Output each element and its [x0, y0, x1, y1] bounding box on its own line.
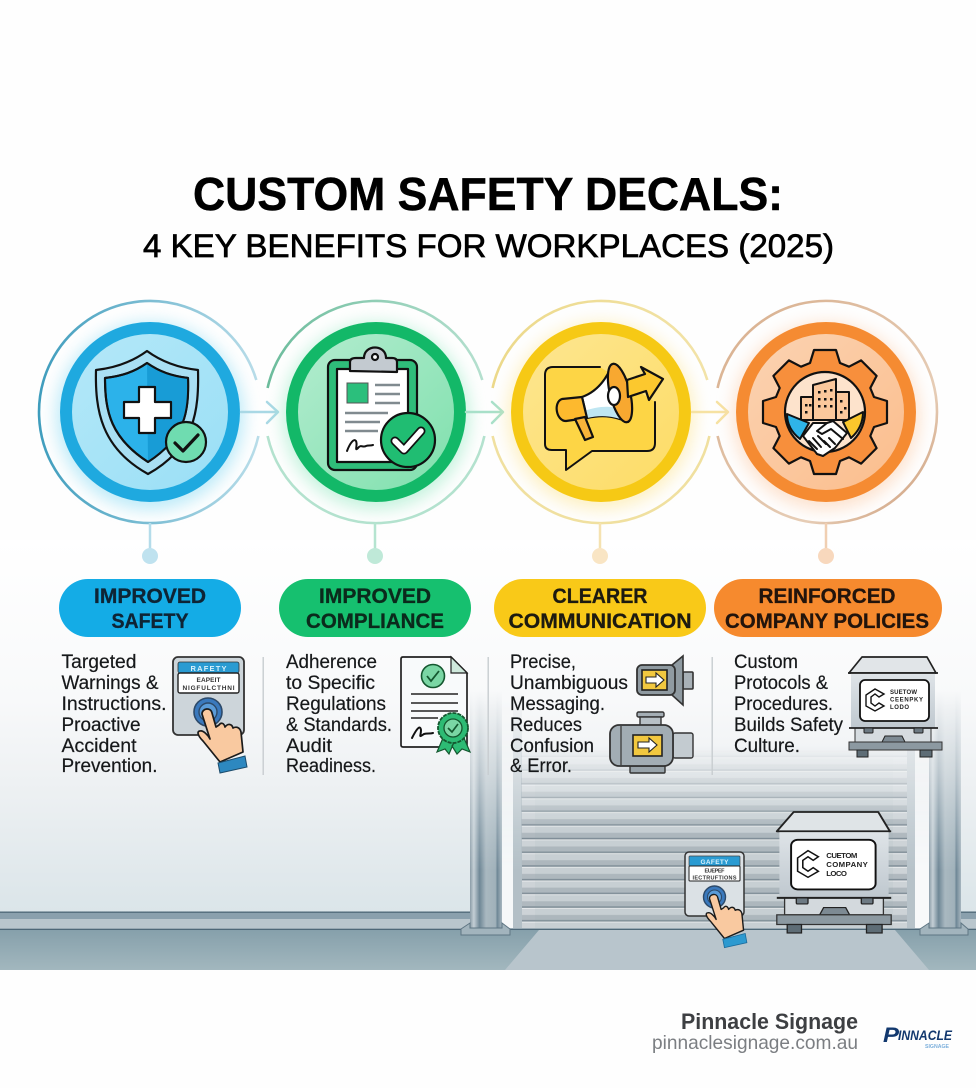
floor [0, 930, 976, 970]
icon: certified document with ribbon [401, 657, 470, 754]
text: improved safety description: Targeted [62, 652, 136, 673]
benefit 2 circle: improved compliance [268, 301, 484, 564]
connector to label [818, 523, 834, 564]
text: improved compliance description [286, 652, 392, 777]
outer ring [39, 301, 258, 523]
text: clearer communication description: Unambiguous [510, 673, 628, 694]
icon: gear with buildings and handshake [763, 350, 887, 474]
pill: clearer communication: CLEARER [552, 585, 648, 608]
icon: safety decal keypad with pointing hand: NIGFULCTHNI [182, 685, 235, 692]
text: clearer communication description [510, 652, 628, 777]
disc [511, 322, 691, 502]
scene: safety decal keypad with pointing hand: IECTRUFTIONS [692, 876, 737, 882]
icon: machine with company logo label: CEENPKY [890, 698, 923, 704]
text: improved compliance description: Readiness. [286, 756, 376, 777]
text: clearer communication description: & Error. [510, 756, 572, 777]
divider 2 [488, 657, 489, 775]
text: improved safety description: Instructions. [62, 694, 166, 715]
background: warehouse scene [0, 694, 976, 970]
text: improved safety description: Prevention. [62, 756, 158, 777]
footer logo: INNACLE [898, 1027, 953, 1043]
text: improved safety description: Warnings & [62, 673, 159, 694]
text: clearer communication description: Messaging. [510, 694, 605, 715]
icon: machine with company logo label: SUETOW [890, 690, 917, 696]
title: CUSTOM SAFETY DECALS: [193, 168, 783, 220]
arrow: safety to compliance [241, 402, 278, 423]
text: improved compliance description: Regulations [286, 694, 386, 715]
roller door [521, 745, 907, 928]
pill: clearer communication: COMMUNICATION [508, 610, 692, 633]
text: reinforced policies description: Protocols & [734, 673, 828, 694]
scene: machine with custom company logo: COMPANY [826, 860, 868, 869]
disc [60, 322, 240, 502]
footer url: pinnaclesignage.com.au [652, 1032, 858, 1054]
disc [736, 322, 916, 502]
arrow: communication to policies [692, 402, 728, 423]
text: improved compliance description: to Specific [286, 673, 375, 694]
connector to label [592, 523, 608, 564]
icon: machine with company logo label: LODO [890, 705, 909, 711]
text: improved compliance description: Audit [286, 736, 333, 757]
text: reinforced policies description: Custom [734, 652, 798, 673]
pill: reinforced company policies: COMPANY POLICIES [725, 610, 929, 633]
wall base strip [0, 912, 976, 930]
icon: motor with arrow label [610, 712, 693, 773]
text: reinforced policies description: Procedures. [734, 694, 833, 715]
outer ring [268, 301, 484, 523]
disc [286, 322, 466, 502]
divider 1 [262, 657, 264, 775]
text: improved safety description: Accident [62, 736, 137, 757]
pill: improved safety [59, 579, 241, 637]
icon: shield with cross and check [96, 351, 206, 474]
icon: safety decal keypad with pointing hand: RAFETY [190, 664, 226, 673]
benefit 3 circle: clearer communication [493, 301, 709, 564]
footer logo: SIGNAGE [925, 1044, 950, 1050]
pill: improved compliance [279, 579, 471, 637]
pill: improved safety: IMPROVED [94, 585, 206, 608]
benefit 4 circle: reinforced company policies [718, 301, 937, 564]
arrow: compliance to communication [466, 402, 503, 423]
pill: reinforced company policies: REINFORCED [758, 585, 896, 608]
pill: improved compliance: IMPROVED [319, 585, 431, 608]
text: reinforced policies description [734, 652, 843, 757]
pill: improved safety: SAFETY [112, 610, 188, 633]
pill: reinforced company policies [714, 579, 942, 637]
icon: safety decal keypad with pointing hand: EAPEIT [196, 677, 221, 684]
icon: machine with company logo label [848, 657, 942, 757]
text: reinforced policies description: Culture. [734, 736, 800, 757]
right door column [907, 702, 961, 928]
scene: safety decal keypad with pointing hand: EUEPEF [704, 868, 725, 874]
footer: company name and url: Pinnacle Signage [681, 1009, 858, 1034]
icon: safety decal keypad with pointing hand [173, 657, 247, 773]
scene: safety decal keypad with pointing hand: GAFETY [700, 859, 729, 866]
connector to label [142, 523, 158, 564]
scene: machine with custom company logo: CUETOM [826, 851, 857, 860]
outer ring [718, 301, 937, 523]
scene: machine with custom company logo: LOCO [826, 869, 847, 878]
text: clearer communication description: Reduces [510, 715, 582, 736]
footer logo [883, 1024, 953, 1050]
text: improved compliance description: & Standards. [286, 715, 392, 736]
connector to label [367, 523, 383, 564]
icon: horn device with arrow label [637, 656, 693, 705]
footer: company name and url [652, 1009, 858, 1054]
outer ring [493, 301, 709, 523]
text: improved compliance description: Adherence [286, 652, 377, 673]
icon: clipboard with check [328, 348, 435, 470]
text: improved safety description [62, 652, 166, 777]
subtitle: 4 KEY BENEFITS FOR WORKPLACES (2025) [143, 228, 834, 264]
pill: clearer communication [494, 579, 706, 637]
scene: machine with custom company logo [777, 812, 891, 933]
text: clearer communication description: Confusion [510, 736, 594, 757]
text: improved safety description: Proactive [62, 715, 140, 736]
text: clearer communication description: Precise, [510, 652, 576, 673]
scene: safety decal keypad with pointing hand [685, 852, 747, 948]
text: reinforced policies description: Builds Safety [734, 715, 843, 736]
footer logo: P [883, 1024, 900, 1047]
divider 3 [712, 657, 713, 775]
benefit 1 circle: improved safety [39, 301, 258, 564]
icon: megaphone speech bubble with arrow [545, 361, 663, 470]
left door column [470, 702, 522, 928]
title [143, 168, 834, 264]
pill: improved compliance: COMPLIANCE [306, 610, 444, 633]
